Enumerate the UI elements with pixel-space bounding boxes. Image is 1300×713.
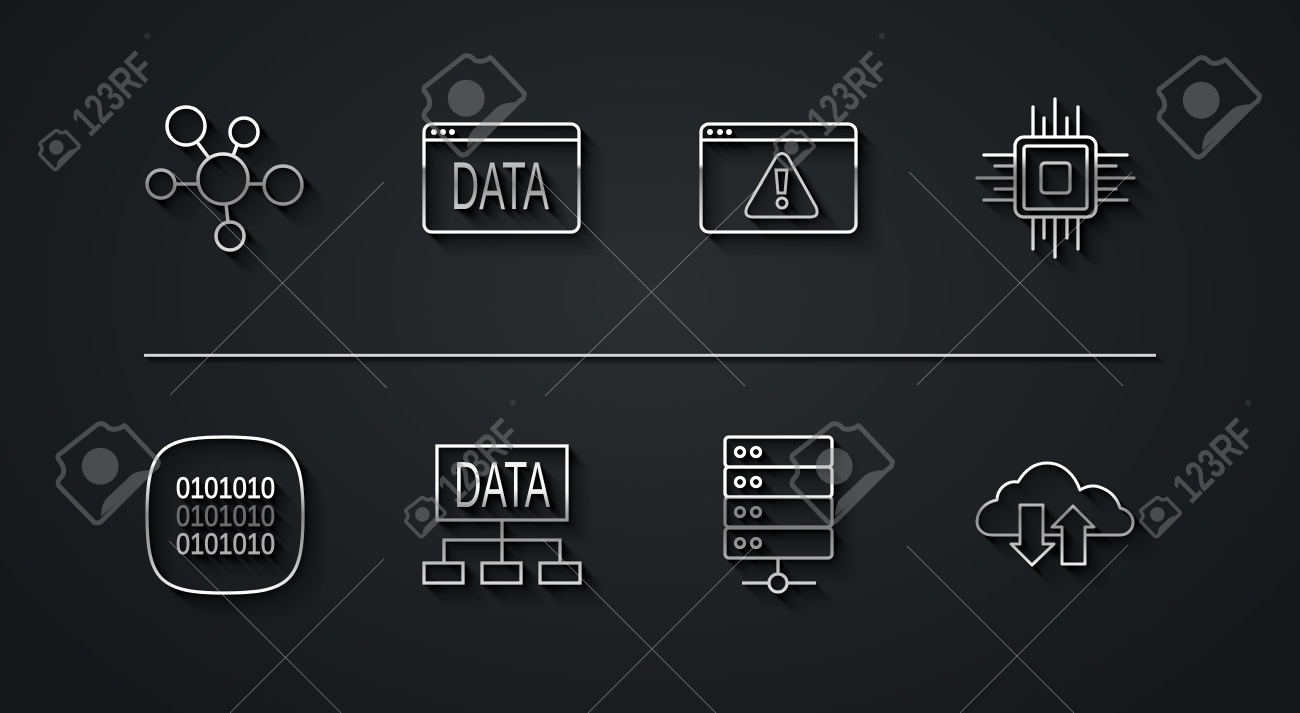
icon: cloud upload and download <box>977 463 1133 565</box>
binary row 2: 0101010 <box>176 500 275 533</box>
watermark: 123RF top left: 123RF <box>62 43 164 145</box>
icon: data hierarchy board <box>424 446 580 583</box>
binary row 1: 0101010 <box>176 472 275 505</box>
watermark: 123RF bottom right: ® <box>1243 398 1254 408</box>
watermark: large egg logo bottom left <box>58 424 158 523</box>
watermark: 123RF bottom center-left: ® <box>508 398 519 408</box>
icon: browser window with warning <box>701 124 856 232</box>
icon: microchip <box>977 99 1134 257</box>
watermark: 123RF top center: ® <box>877 31 888 41</box>
watermark: 123RF top center <box>775 31 899 170</box>
watermark: large egg logo top right <box>1159 58 1259 157</box>
watermark: large egg logo top center <box>424 56 524 155</box>
watermark: 123RF top center: 123RF <box>797 43 899 145</box>
DATA label on board: DATA <box>454 448 550 521</box>
watermark: large egg logo bottom center <box>792 424 892 523</box>
watermark: 123RF bottom center-left <box>406 398 530 537</box>
icon: server rack network <box>725 437 832 592</box>
horizontal divider <box>144 354 1156 357</box>
icon: molecule network <box>147 107 302 250</box>
icon: browser window with DATA <box>424 124 579 232</box>
warning triangle <box>746 154 817 217</box>
binary row 3: 0101010 <box>176 528 275 561</box>
thin diagonal lines <box>169 172 1132 713</box>
watermark: 123RF bottom right: 123RF <box>1163 410 1265 512</box>
watermark: 123RF bottom right <box>1141 398 1265 537</box>
icon: binary code squircle <box>147 437 303 593</box>
watermark: 123RF top left <box>40 31 164 170</box>
watermark: 123RF bottom center-left: 123RF <box>428 410 530 512</box>
watermark: 123RF top left: ® <box>142 31 153 41</box>
DATA label in window: DATA <box>451 148 549 224</box>
